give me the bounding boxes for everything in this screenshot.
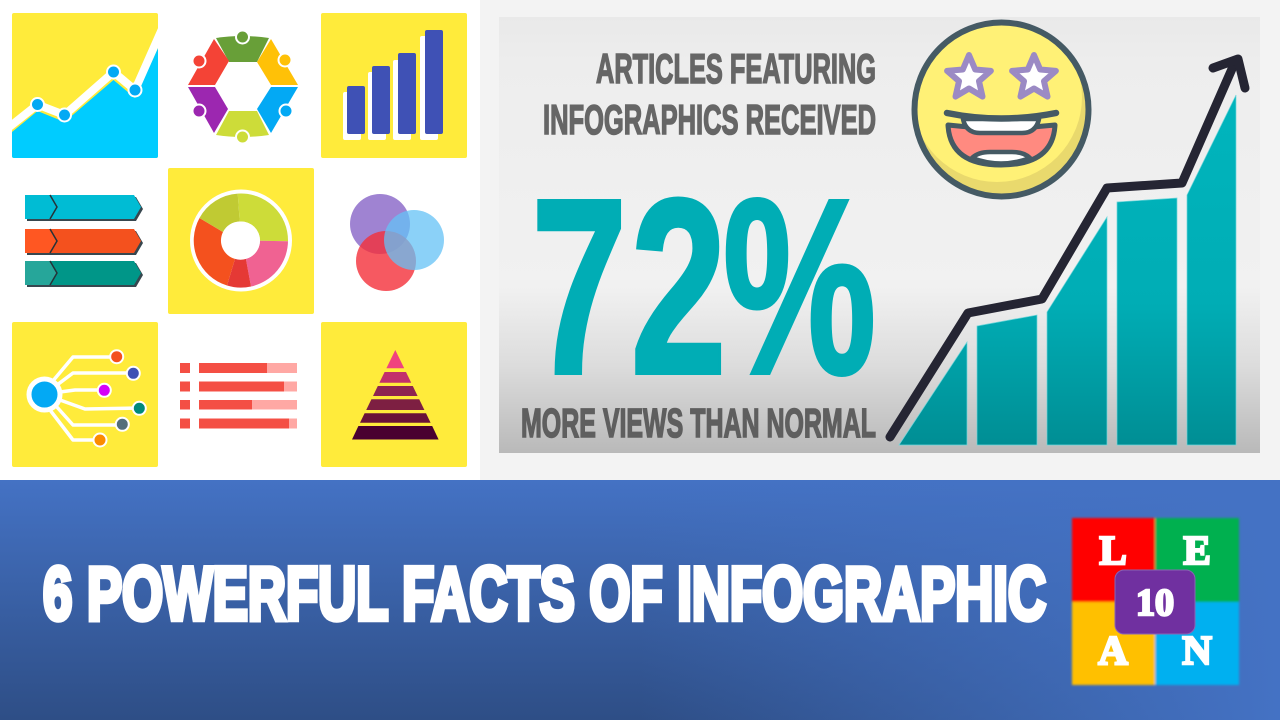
heading: articles featuring: ARTICLES FEATURING [596,45,876,92]
icon: hexagonal segmented ring [188,30,298,144]
panel: area chart tile [8,13,162,158]
chart: rising bars with arrow [890,59,1245,445]
background: right grey area [480,0,1280,480]
panel: bar chart tile [321,13,467,158]
logo: LEAN 10: L [1099,527,1127,573]
panel: node tree tile [12,322,158,467]
logo: LEAN 10: E [1183,527,1211,573]
panel: pyramid tile [321,322,467,467]
panel: statistic card [499,17,1260,453]
background: left white area [0,0,480,480]
logo: LEAN 10 [1072,518,1239,685]
icon: star-eyed smiling face [912,12,1088,196]
logo: LEAN 10: 10 [1136,582,1174,624]
panel: donut chart tile [168,168,314,314]
icon: venn diagram circles [350,194,444,291]
big number: 72 percent: 72% [531,147,876,427]
logo: LEAN 10: N [1182,627,1212,673]
icon: progress list [180,363,297,428]
icon: three arrow bars [25,195,143,287]
arrow line [890,59,1245,437]
logo: LEAN 10: A [1098,627,1128,673]
text: more views than normal: MORE VIEWS THAN NORMAL [521,400,876,446]
heading: infographics received: INFOGRAPHICS RECEIVED [543,96,876,143]
banner: blue title bar [0,480,1280,720]
